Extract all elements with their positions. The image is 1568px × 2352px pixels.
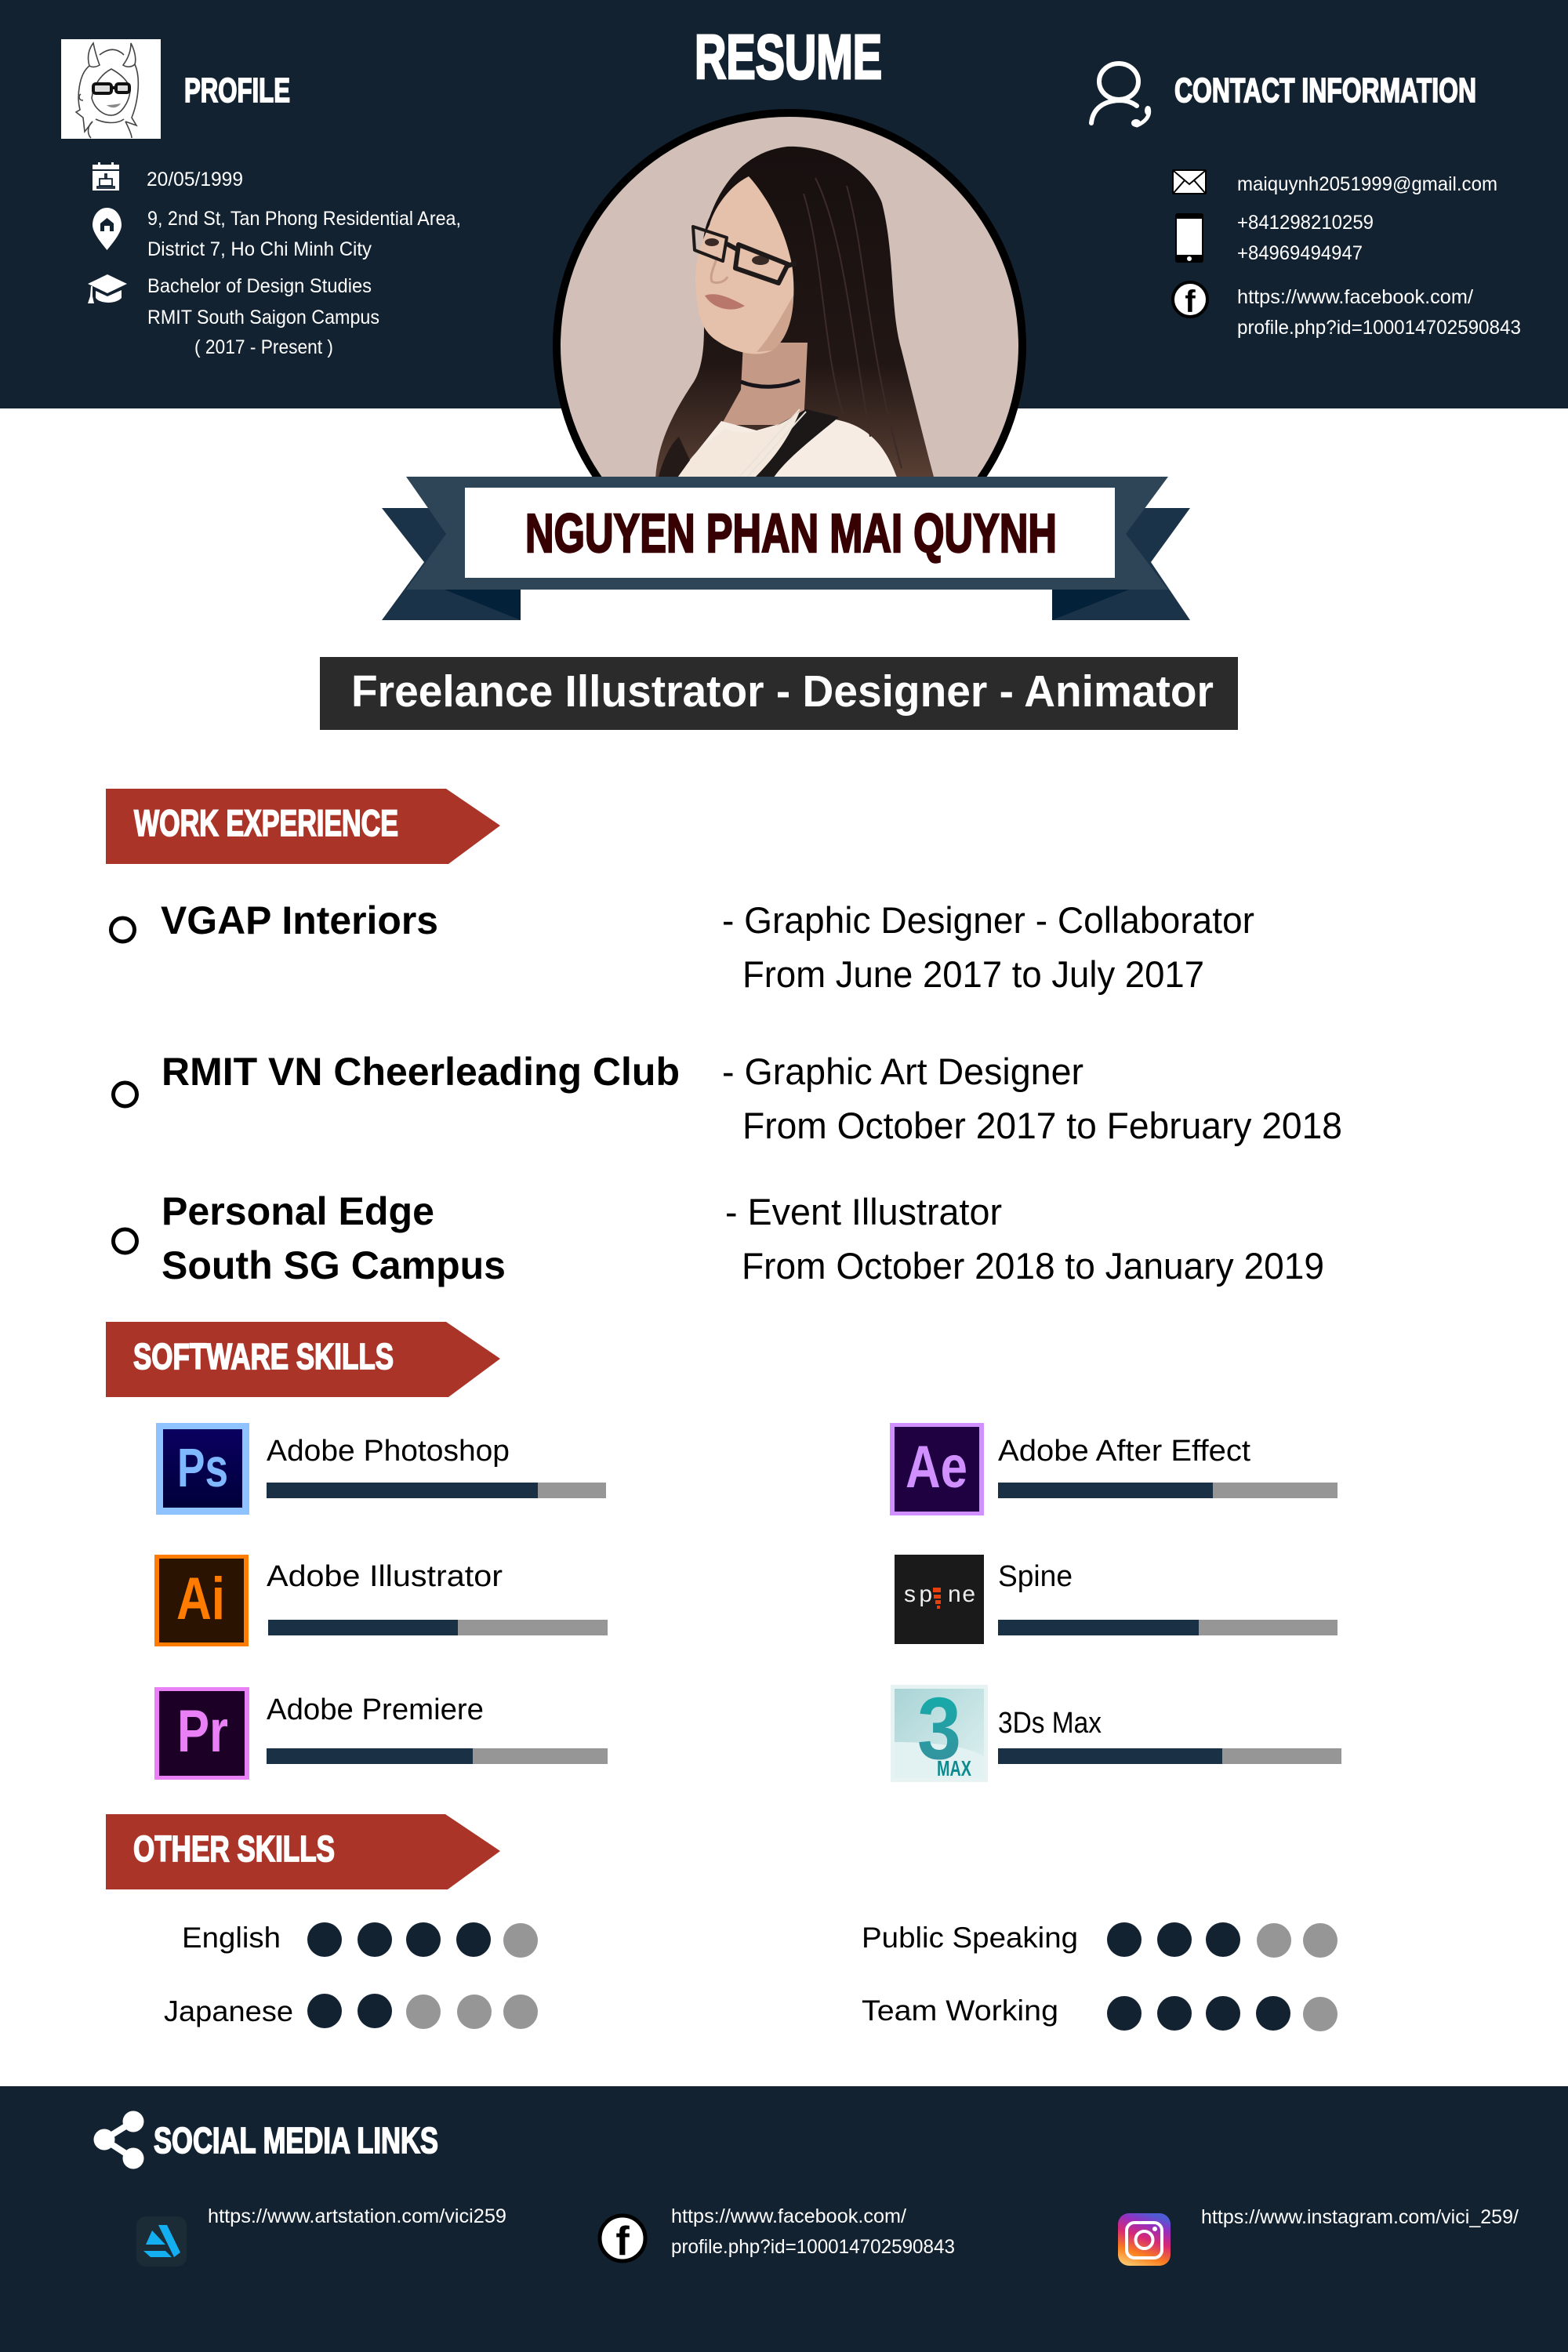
facebook link: profile.php?id=100014702590843 [1237,317,1521,339]
work entry: VGAP: - Graphic Designer - Collaborator [722,899,1254,941]
job title bar [320,657,1238,730]
education: Bachelor of Design Studies [147,275,372,297]
skill: Photoshop [156,1423,606,1515]
section banner: other skills: OTHER SKILLS [133,1828,335,1869]
instagram link: https://www.instagram.com/vici_259/ [1201,2206,1519,2228]
work entry: RMIT: RMIT VN Cheerleading Club [162,1050,680,1094]
work entry: VGAP: VGAP Interiors [161,898,438,942]
skill: Spine: Spine [998,1560,1073,1593]
section banner: other skills [106,1814,500,1889]
skill: After Effects: Adobe After Effect [998,1435,1250,1468]
skill: Photoshop: Adobe Photoshop [267,1435,510,1468]
birth date: 20/05/1999 [147,169,243,191]
section banner: software skills [106,1322,500,1397]
icon: facebook: f [1185,285,1196,319]
icon: share [94,2111,144,2169]
other skill: Public Speaking [862,1922,1338,1958]
skill: 3Ds Max [891,1679,1341,1782]
education [147,275,379,358]
artstation link: https://www.artstation.com/vici259 [208,2205,506,2227]
skill: Illustrator [154,1555,608,1646]
skill: Illustrator: Ai [176,1566,225,1632]
skill: 3Ds Max: 3 [917,1679,961,1777]
icon: facebook footer: f [615,2219,630,2264]
skill: 3Ds Max: MAX [937,1756,971,1780]
other skill: Public Speaking: Public Speaking [862,1922,1078,1954]
icon: contact person [1091,64,1151,127]
skill: After Effects [890,1423,1338,1515]
icon: home pin [93,208,122,250]
phone numbers: +841298210259 [1237,212,1374,234]
icon: instagram [1118,2213,1171,2266]
icon: birthday calendar [93,162,119,191]
other skill: Team Working: Team Working [862,1994,1058,2027]
work entry: VGAP [111,898,1254,995]
heading: profile: PROFILE [184,71,290,110]
heading: social media links: SOCIAL MEDIA LINKS [154,2120,438,2161]
phone numbers [1237,212,1374,264]
facebook footer link: profile.php?id=100014702590843 [671,2236,955,2258]
facebook link: https://www.facebook.com/ [1237,286,1473,308]
icon: envelope [1172,169,1207,194]
ribbon name banner [382,477,1190,620]
other skill: Team Working [862,1994,1338,2031]
work entry: RMIT: - Graphic Art Designer [722,1051,1083,1092]
skill: Spine [895,1555,1338,1644]
skill: Premiere: Pr [177,1698,228,1765]
icon: artstation [136,2216,187,2267]
facebook footer link [671,2205,955,2258]
footer background [0,2086,1568,2352]
other skill: English: English [182,1922,281,1954]
skill: Spine: ne [948,1581,975,1607]
other skill: Japanese [164,1994,538,2029]
skill: Photoshop: Ps [177,1437,228,1498]
skill: 3Ds Max: 3Ds Max [998,1707,1102,1740]
icon: facebook footer [600,2216,645,2264]
work entry: RMIT: From October 2017 to February 2018 [742,1105,1342,1146]
education: ( 2017 - Present ) [194,336,333,358]
work entry: Personal Edge: Personal Edge [162,1189,434,1233]
education: RMIT South Saigon Campus [147,307,379,328]
icon: avatar sketch [61,39,161,139]
header background [0,0,1568,408]
work entry: VGAP: From June 2017 to July 2017 [742,953,1204,995]
icon: phone [1175,213,1203,263]
icon: graduation cap [88,274,127,303]
icon: facebook [1173,282,1207,319]
portrait photo [549,102,1035,486]
skill: Illustrator: Adobe Illustrator [267,1560,503,1593]
phone numbers: +84969494947 [1237,242,1363,264]
skill: Premiere: Adobe Premiere [267,1693,484,1726]
section banner: work experience: WORK EXPERIENCE [134,802,398,844]
address [147,208,461,260]
work entry: Personal Edge: From October 2018 to January 2019 [742,1245,1324,1287]
address: 9, 2nd St, Tan Phong Residential Area, [147,208,461,230]
job title bar: Freelance Illustrator - Designer - Animator [351,666,1214,717]
facebook footer link: https://www.facebook.com/ [671,2205,906,2227]
other skill: English [182,1922,538,1958]
skill: Spine: sp [904,1581,932,1607]
skill: After Effects: Ae [906,1434,967,1501]
work entry: RMIT [113,1050,1342,1146]
other skill: Japanese: Japanese [164,1995,293,2027]
facebook link [1237,286,1521,339]
address: District 7, Ho Chi Minh City [147,238,372,260]
email: maiquynh2051999@gmail.com [1237,173,1497,195]
work entry: Personal Edge: - Event Illustrator [725,1191,1002,1232]
name: NGUYEN PHAN MAI QUYNH [525,503,1057,564]
work entry: Personal Edge: South SG Campus [162,1243,506,1287]
skill: Premiere [154,1687,608,1780]
section banner: work experience [106,789,500,864]
title: RESUME [695,22,882,92]
work entry: Personal Edge [113,1189,1324,1287]
section banner: software skills: SOFTWARE SKILLS [133,1336,394,1377]
